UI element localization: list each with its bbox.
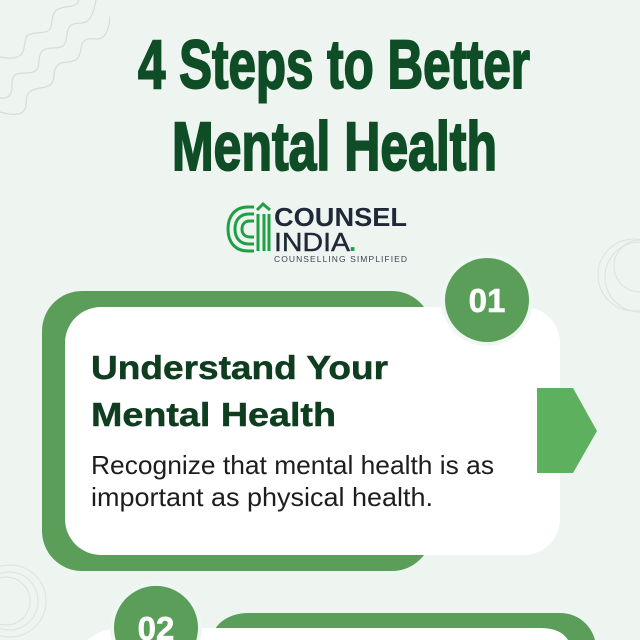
title [138,26,530,185]
step 2 badge [110,582,202,640]
decoration: wavy lines [0,0,110,114]
step 1 green backing [42,291,432,571]
step 1 body text: Recognize that mental health is as [91,450,494,480]
panel: step 2 [88,582,595,640]
step 1 body text [91,450,494,512]
logo: Counsel India [228,202,407,264]
logo wordmark: INDIA [274,227,351,257]
title: Mental Health [172,108,497,185]
step 1 body text: important as physical health. [91,482,433,512]
icon: logo mark [228,204,270,251]
logo wordmark: COUNSELLING SIMPLIFIED [274,254,407,264]
panel: step 1 [42,254,597,571]
decoration: circles bottom left [0,565,46,637]
step 1 badge [441,254,533,346]
step 1 badge: 01 [469,282,505,319]
step 1 heading: Mental Health [91,396,336,433]
arrow: step 1 pointer [537,388,597,473]
logo wordmark [274,202,407,264]
step 1 heading: Understand Your [91,349,388,386]
logo wordmark: . [349,227,356,257]
step 1 heading [91,349,388,433]
logo wordmark: COUNSEL [274,202,407,232]
step 1 white card [65,307,560,555]
step 2 white card [88,628,568,640]
step 2 green backing [212,613,595,640]
decoration: circles top right [598,239,640,312]
